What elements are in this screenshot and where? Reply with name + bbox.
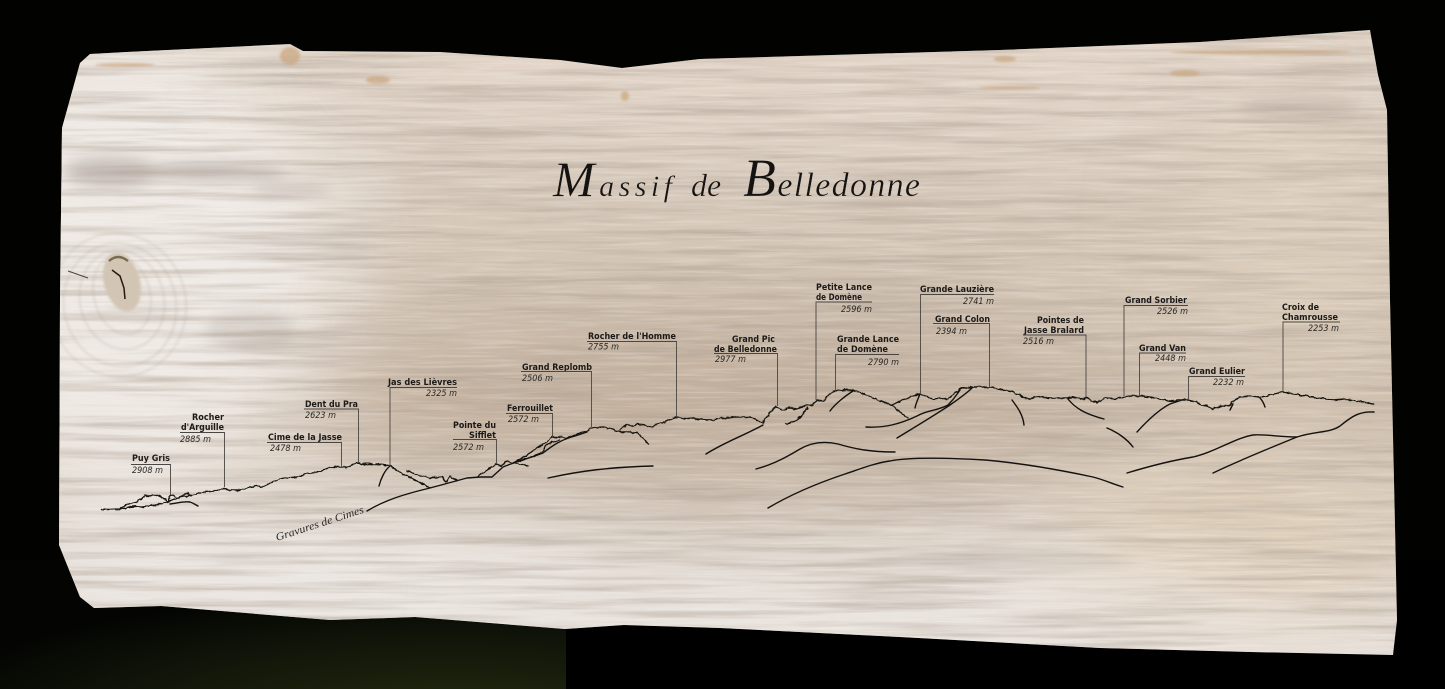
label: Jas des Lièvres: Jas des Lièvres (387, 377, 457, 388)
signature: Gravures de Cimes (274, 504, 365, 544)
label: Pointes de Jasse Bralard: Jasse Bralard (1023, 326, 1084, 336)
label: Petite Lance de Domène (816, 283, 872, 400)
label: Croix de Chamrousse: 2253 m (1308, 324, 1339, 334)
label: Rocher de l'Homme (587, 332, 676, 417)
label: Ferrouillet: 2572 m (508, 415, 539, 425)
label: Dent du Pra: 2623 m (305, 411, 336, 421)
label: Grand Van: Grand Van (1139, 344, 1186, 354)
label: Grand Colon: Grand Colon (935, 315, 990, 325)
label: Croix de Chamrousse (1282, 303, 1340, 392)
label: Pointes de Jasse Bralard (1023, 316, 1086, 397)
smooth lower lines (170, 388, 1374, 511)
title: Massif (552, 151, 676, 207)
label: Grand Sorbier: Grand Sorbier (1125, 296, 1188, 306)
label: Grande Lance de Domène (836, 335, 899, 391)
label: Grande Lance de Domène: de Domène (837, 344, 888, 355)
label: Ferrouillet: Ferrouillet (507, 404, 553, 414)
label: Grand Replomb: 2506 m (522, 374, 553, 384)
label: Grand Pic de Belledonne: Grand Pic (732, 335, 775, 345)
label: Grand Pic de Belledonne (714, 335, 778, 406)
label: Pointes de Jasse Bralard: 2516 m (1023, 337, 1054, 347)
light patch: left side of the board (0, 30, 350, 510)
label: Pointe du Sifflet (453, 421, 496, 464)
label: Puy Gris: 2908 m (132, 466, 163, 476)
label: Jas des Lièvres (387, 377, 457, 466)
label: Jas des Lièvres: 2325 m (426, 389, 457, 399)
label: Rocher d'Arguille: 2885 m (180, 435, 211, 445)
label: Pointe du Sifflet: 2572 m (453, 443, 484, 453)
label: Cime de la Jasse: Cime de la Jasse (268, 433, 342, 443)
grey grain patches (64, 102, 1360, 565)
label: Rocher de l'Homme: 2755 m (588, 342, 619, 352)
label: Cime de la Jasse: 2478 m (270, 444, 301, 454)
label: Grand Replomb (521, 363, 592, 427)
label: Puy Gris: Puy Gris (132, 454, 170, 464)
label: Grand Eulier: 2232 m (1213, 378, 1244, 388)
label: Rocher d'Arguille: Rocher (192, 413, 225, 423)
label: Cime de la Jasse (267, 433, 342, 467)
label: Croix de Chamrousse: Chamrousse (1282, 313, 1338, 323)
knot with rings (60, 232, 187, 378)
label: Dent du Pra (304, 400, 358, 463)
label: Pointes de Jasse Bralard: Pointes de (1037, 316, 1084, 326)
label: Grande Lance de Domène: Grande Lance (837, 335, 899, 345)
label: Grand Replomb: Grand Replomb (522, 363, 592, 373)
label: Grand Pic de Belledonne: de Belledonne (714, 345, 777, 355)
label: Grand Eulier (1188, 367, 1246, 400)
title (552, 148, 920, 208)
bark edges (95, 47, 1350, 101)
label: Dent du Pra: Dent du Pra (305, 400, 358, 410)
label: Grande Lauzière: Grande Lauzière (920, 284, 994, 295)
label: Grand Van (1139, 344, 1186, 396)
label: Petite Lance de Domène: Petite Lance (816, 283, 872, 293)
label: Grand Colon: 2394 m (936, 327, 967, 337)
label: Rocher d'Arguille: d'Arguille (181, 423, 224, 433)
mountain ridge line drawing (102, 387, 1374, 511)
label: Croix de Chamrousse: Croix de (1282, 303, 1319, 313)
label: Rocher d'Arguille (180, 413, 225, 487)
label: Grand Colon (933, 315, 990, 387)
label: Pointe du Sifflet: Pointe du (453, 421, 496, 431)
title: Belledonne (743, 148, 920, 208)
label: Rocher de l'Homme: Rocher de l'Homme (588, 332, 676, 342)
crest lines (102, 387, 1373, 510)
label: Grand Van: 2448 m (1155, 354, 1186, 364)
label: Grande Lauzière: 2741 m (963, 297, 994, 307)
label: Puy Gris (131, 454, 170, 495)
label: Pointe du Sifflet: Sifflet (469, 431, 496, 441)
label: Grand Sorbier (1124, 296, 1188, 396)
label: Grand Pic de Belledonne: 2977 m (715, 355, 746, 365)
label: Grand Eulier: Grand Eulier (1189, 367, 1246, 377)
label: Petite Lance de Domène: 2596 m (841, 305, 872, 315)
label: Grand Sorbier: 2526 m (1157, 307, 1188, 317)
label: Petite Lance de Domène: de Domène (816, 292, 862, 303)
label: Ferrouillet (506, 404, 553, 437)
label: Grande Lauzière (920, 284, 994, 394)
label: Grande Lance de Domène: 2790 m (868, 358, 899, 368)
title: de (691, 167, 721, 203)
